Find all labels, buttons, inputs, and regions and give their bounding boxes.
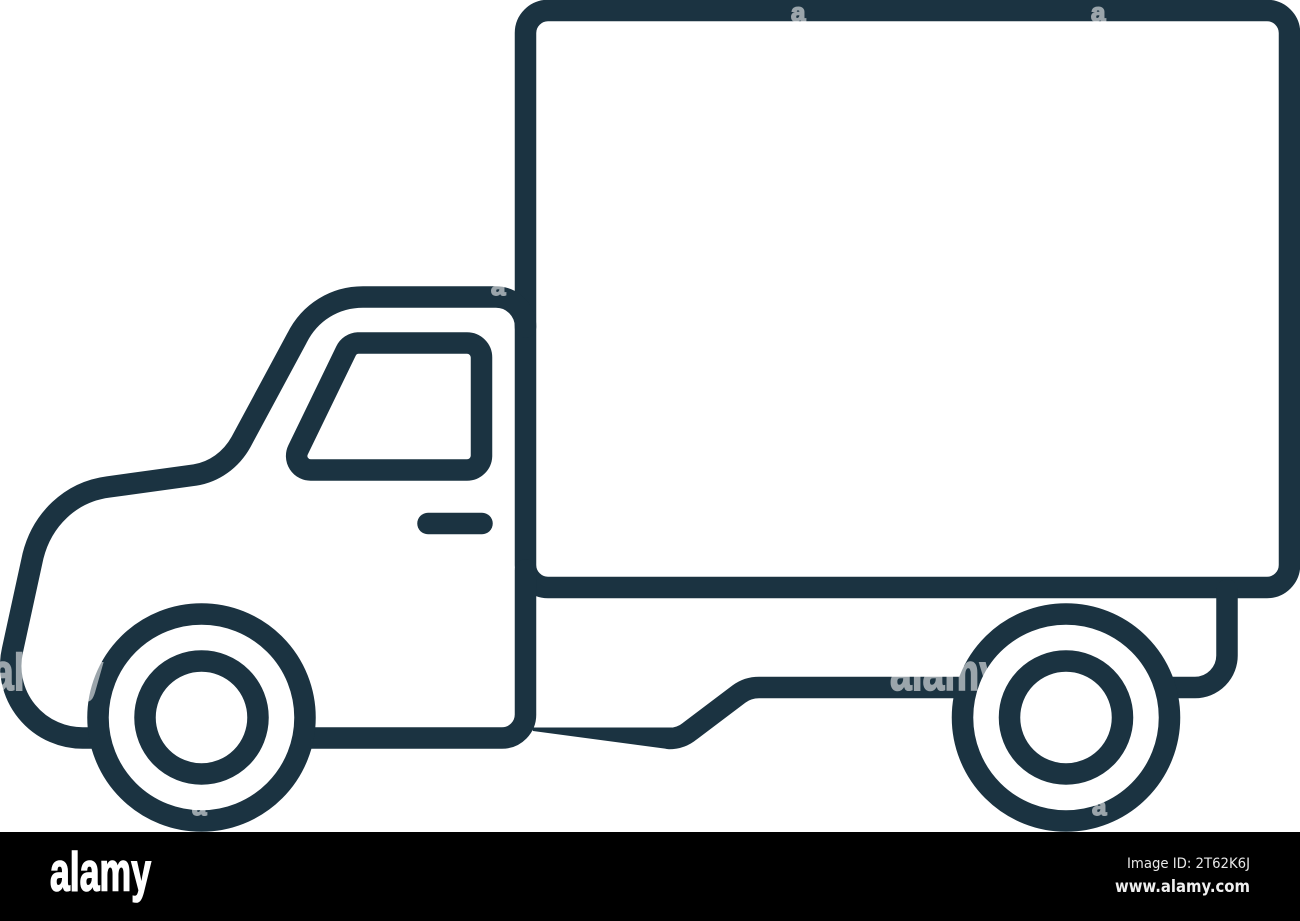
cab bottom edge	[308, 570, 526, 738]
image id: Image ID: 2T62K6J	[1127, 856, 1250, 872]
chassis wedge	[532, 728, 672, 749]
cab outline	[11, 297, 526, 738]
website: www.alamy.com	[1115, 877, 1250, 896]
front wheel	[98, 614, 305, 821]
brand logo text: alamy	[50, 840, 151, 902]
watermark fragments: alamy	[890, 644, 1001, 702]
door handle	[428, 513, 482, 534]
cargo box	[526, 10, 1290, 588]
watermark fragments	[0, 0, 1107, 821]
cab window	[297, 343, 482, 470]
watermark fragments: a	[192, 791, 207, 821]
rear mudguard	[1172, 590, 1227, 688]
rear wheel	[962, 614, 1170, 821]
watermark fragments: a	[491, 271, 506, 301]
footer bar	[0, 832, 1300, 921]
chassis underside	[669, 688, 960, 738]
watermark fragments: a	[1092, 791, 1107, 821]
